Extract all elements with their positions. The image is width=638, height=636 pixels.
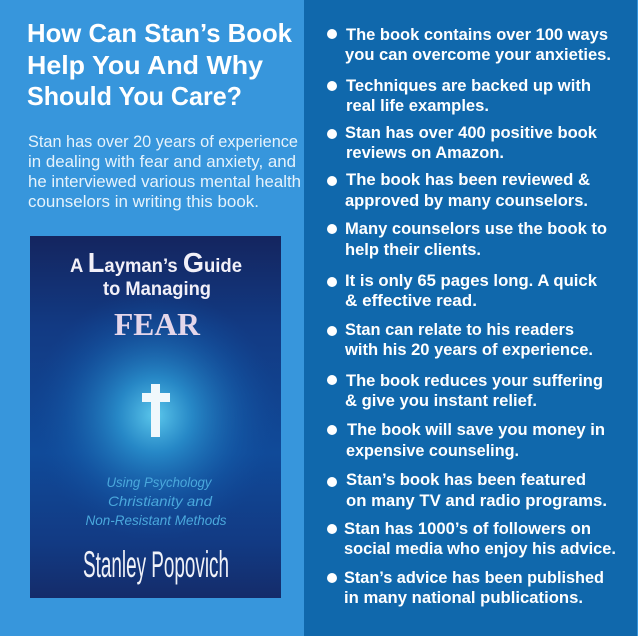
cover script subtitle: Christianity and: [108, 493, 213, 509]
bullet 7: with his 20 years of experience.: [344, 341, 593, 359]
cover script subtitle: [86, 474, 226, 528]
bullet 4: approved by many counselors.: [345, 192, 588, 210]
cover title: A Layman's Guide: A Layman’s Guide: [70, 247, 242, 278]
bullet 1: The book contains over 100 ways: [346, 26, 608, 44]
bullet 10: Stan’s book has been featured: [346, 471, 586, 489]
left panel background: [0, 0, 304, 636]
bullet 5: Many counselors use the book to: [345, 220, 607, 238]
bullet 9: The book will save you money in: [347, 421, 605, 439]
bullet 2: [327, 77, 591, 115]
bullet 11: social media who enjoy his advice.: [344, 540, 616, 558]
bullet 8: & give you instant relief.: [345, 392, 537, 410]
bullet 3: Stan has over 400 positive book: [345, 124, 598, 142]
right panel background: [304, 0, 637, 636]
bullet 8: [327, 372, 603, 410]
cover script subtitle: Using Psychology: [106, 474, 212, 490]
bullet 12: Stan’s advice has been published: [344, 569, 604, 587]
bullet 9: [327, 421, 605, 460]
title: [27, 18, 293, 111]
intro paragraph: counselors in writing this book.: [28, 192, 259, 211]
bullet 6: It is only 65 pages long. A quick: [345, 272, 598, 290]
icon: cross: [142, 384, 170, 437]
bullet 6: [327, 272, 598, 310]
bullet 1: [327, 26, 611, 64]
bullet 3: reviews on Amazon.: [346, 144, 504, 162]
bullet 2: real life examples.: [346, 97, 489, 115]
intro paragraph: he interviewed various mental health: [28, 172, 301, 191]
book cover: [30, 236, 281, 598]
title: Help You And Why: [27, 50, 264, 80]
intro paragraph: [28, 132, 301, 211]
bullet 5: help their clients.: [345, 241, 481, 259]
bullet 7: [327, 321, 593, 359]
bullet 3: [327, 124, 598, 162]
bullet 4: [327, 171, 590, 210]
cover word: FEAR: FEAR: [114, 306, 201, 342]
bullet 11: [327, 520, 616, 558]
bullet 2: Techniques are backed up with: [346, 77, 591, 95]
cover subtitle: to Managing: to Managing: [103, 279, 211, 300]
bullet 5: [327, 220, 607, 259]
bullet 11: Stan has 1000’s of followers on: [344, 520, 591, 538]
bullet 1: you can overcome your anxieties.: [345, 46, 611, 64]
bullet list: [327, 26, 616, 607]
bullet 12: in many national publications.: [344, 589, 583, 607]
title: How Can Stan’s Book: [27, 18, 293, 48]
bullet 10: on many TV and radio programs.: [346, 492, 607, 510]
cover script subtitle: Non-Resistant Methods: [86, 512, 226, 528]
title: Should You Care?: [27, 81, 242, 111]
bullet 10: [327, 471, 607, 510]
intro paragraph: in dealing with fear and anxiety, and: [28, 152, 296, 171]
bullet 6: & effective read.: [345, 292, 477, 310]
bullet 4: The book has been reviewed &: [346, 171, 590, 189]
bullet 7: Stan can relate to his readers: [345, 321, 574, 339]
bullet 12: [327, 569, 604, 607]
cover author name: Stanley Popovich: [83, 544, 229, 585]
bullet 9: expensive counseling.: [346, 442, 519, 460]
bullet 8: The book reduces your suffering: [346, 372, 603, 390]
intro paragraph: Stan has over 20 years of experience: [28, 132, 298, 151]
